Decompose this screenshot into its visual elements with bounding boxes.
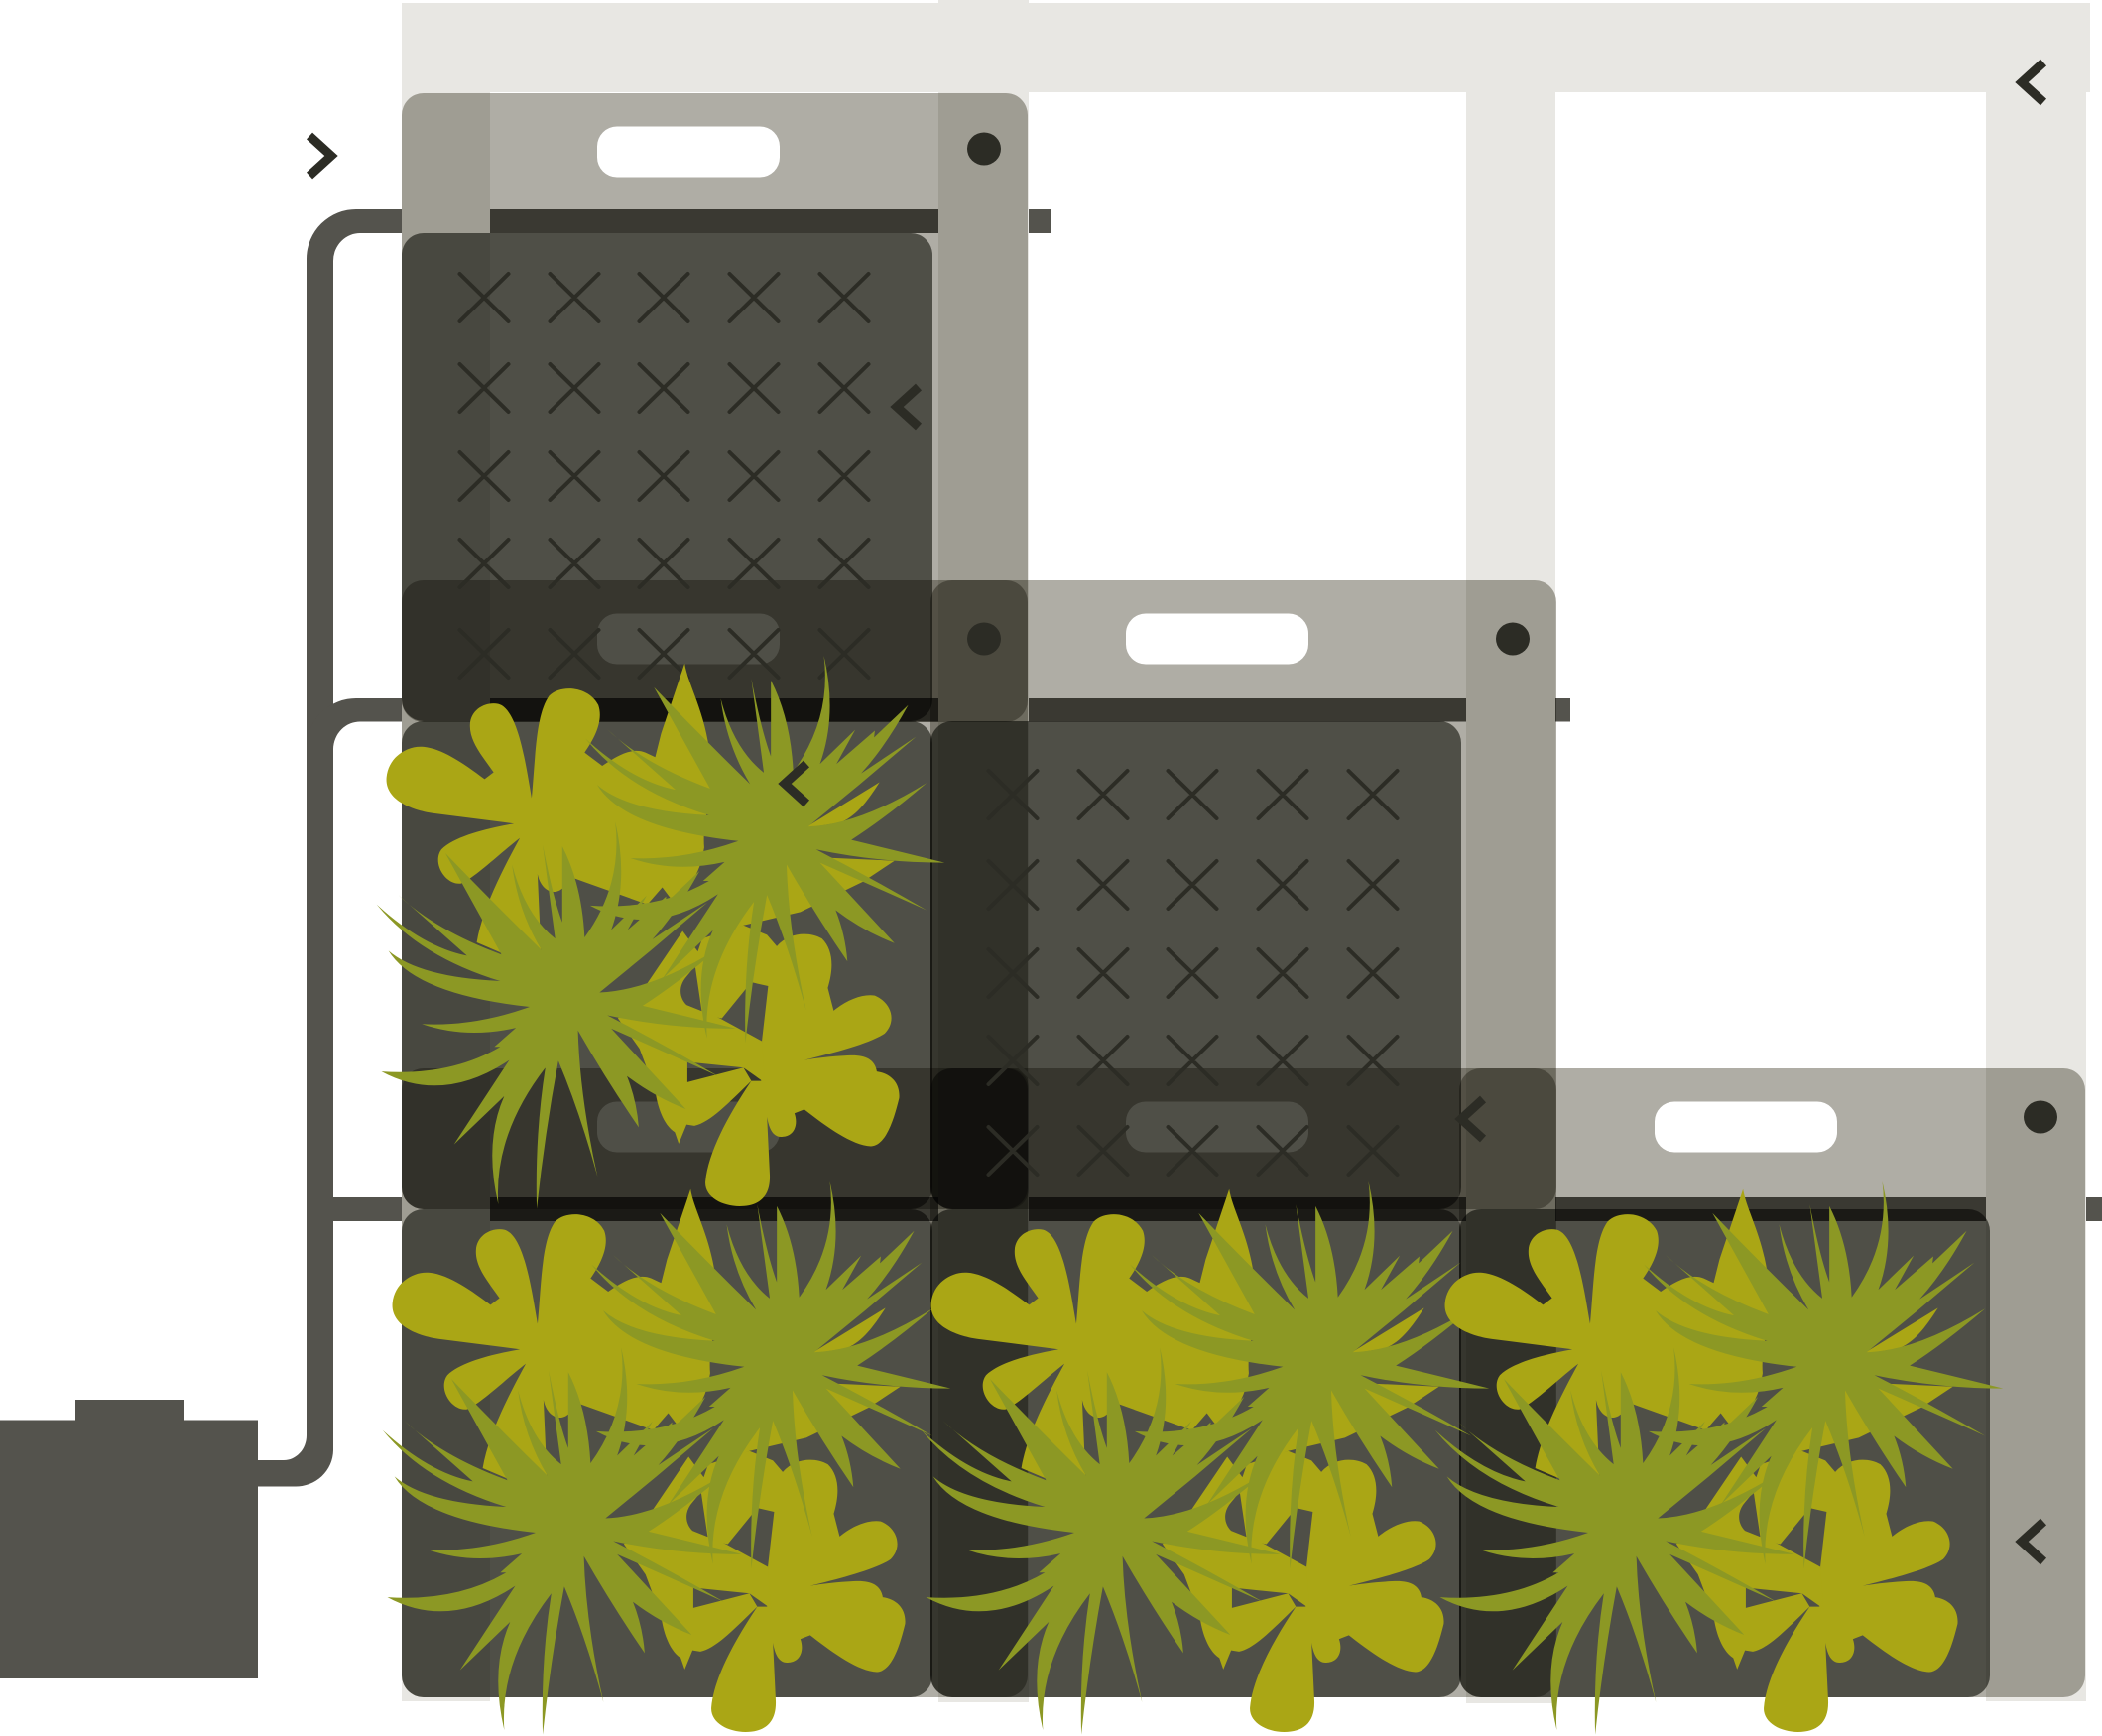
crate: bottom centre back plate — [930, 1068, 1556, 1697]
arrow: top right — [2022, 62, 2043, 102]
crate: middle centre back plate — [930, 580, 1556, 1209]
crate: bottom right back plate — [1459, 1068, 2085, 1697]
irrigation pipes — [258, 209, 2102, 1487]
crate: bottom right basket — [1459, 1209, 1990, 1697]
plants: middle left — [377, 656, 944, 1209]
arrow: middle left plant — [785, 764, 806, 804]
support frame — [402, 0, 2090, 1703]
plants: bottom left — [383, 1181, 950, 1735]
crate: bottom centre overlap shadow — [931, 1068, 1029, 1209]
crate: middle centre basket — [930, 721, 1461, 1209]
arrow: right column — [2022, 1522, 2043, 1561]
crate: top left basket — [402, 233, 932, 721]
crate: middle left basket — [402, 721, 932, 1209]
mounting holes — [967, 133, 2057, 1133]
arrow: top left pointing right — [309, 136, 331, 176]
crate: middle left back plate — [402, 580, 1028, 1209]
crate: top left back plate — [402, 93, 1028, 722]
crate: bottom left back plate — [402, 1068, 1028, 1697]
arrow: top crate — [897, 387, 919, 427]
basket mesh: top left — [460, 274, 869, 678]
water tank — [0, 1400, 258, 1678]
crate: bottom left basket — [402, 1209, 932, 1697]
crate: bottom centre basket — [930, 1209, 1461, 1697]
plants: bottom right — [1435, 1181, 2003, 1735]
plants: bottom centre — [922, 1181, 1489, 1735]
basket mesh: middle centre — [988, 771, 1397, 1175]
arrow: centre crate overlap — [1461, 1099, 1483, 1139]
